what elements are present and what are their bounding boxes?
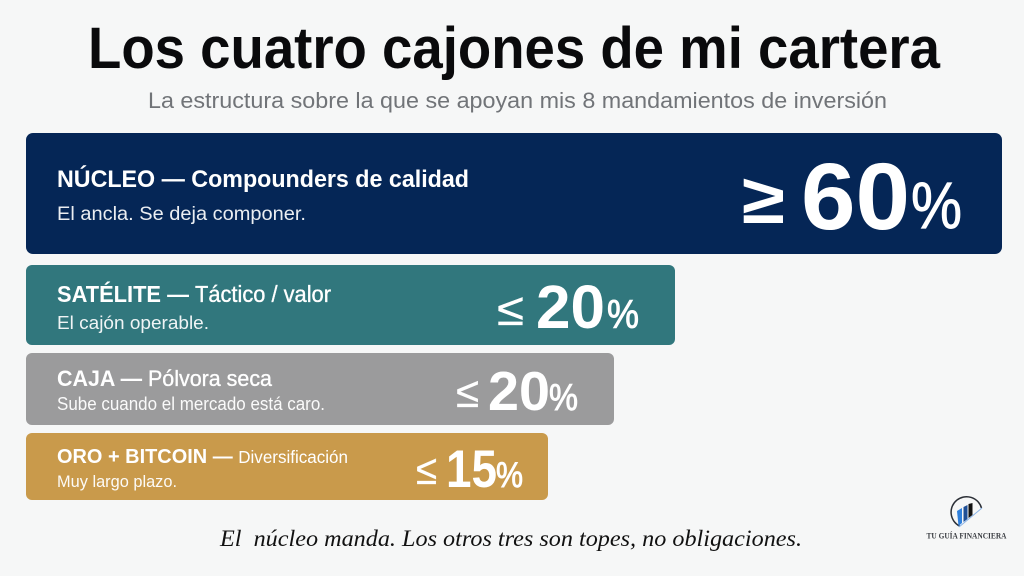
value: máximo 20% satélite: 20 [536, 273, 605, 341]
panel: núcleo [26, 133, 1002, 254]
title: Los cuatro cajones de mi cartera [88, 16, 941, 81]
description: núcleo: El ancla. Se deja componer. [57, 203, 306, 225]
value: máximo 15%: 15 [446, 440, 497, 499]
logo wordmark: TU GUÍA FINANCIERA [926, 530, 1007, 540]
closing statement: El núcleo manda. Los otros tres son topes, no obligaciones. [219, 526, 802, 551]
value: máximo 15% [416, 440, 523, 499]
logo: tu guía financiera [926, 497, 1007, 540]
value: máximo 20% caja: ≤ [456, 369, 479, 417]
value: máximo 20% caja [456, 360, 578, 422]
value: máximo 15%: % [496, 456, 523, 495]
panel: satélite [26, 265, 675, 345]
panel: caja [26, 353, 614, 425]
description: satélite: El cajón operable. [57, 312, 209, 333]
value: máximo 20% satélite: ≤ [497, 283, 524, 335]
panel: oro + bitcoin [26, 433, 548, 500]
heading: núcleo: NÚCLEO — Compounders de calidad [57, 165, 469, 193]
value: mínimo 60%: % [911, 168, 962, 242]
description: oro + bitcoin: Muy largo plazo. [57, 472, 177, 491]
icon: bar chart in circle [951, 497, 982, 527]
value: máximo 20% satélite: % [607, 293, 639, 337]
heading: satélite: SATÉLITE — Táctico / valor [57, 280, 331, 307]
subtitle: La estructura sobre la que se apoyan mis 8 mandamientos de inversión [148, 88, 887, 113]
heading: caja: CAJA — Pólvora seca [57, 366, 272, 391]
value: máximo 20% caja: % [549, 377, 578, 418]
value: máximo 20% satélite [497, 273, 639, 341]
value: mínimo 60%: ≥ [742, 160, 785, 238]
value: máximo 20% caja: 20 [488, 360, 550, 422]
value: mínimo 60%: 60 [801, 144, 910, 250]
description: caja: Sube cuando el mercado está caro. [57, 394, 325, 414]
heading: oro + bitcoin: ORO + BITCOIN — Diversificación [57, 445, 348, 468]
value: mínimo 60% [742, 144, 962, 250]
value: máximo 15%: ≤ [416, 446, 437, 493]
